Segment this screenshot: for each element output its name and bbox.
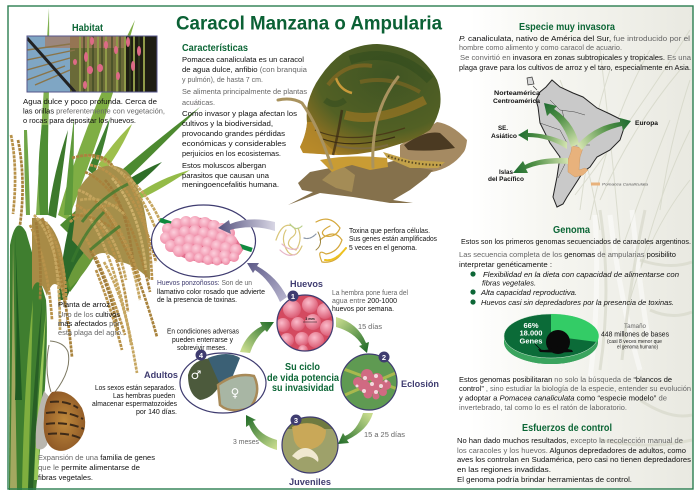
heading: genoma: Genoma <box>553 225 591 236</box>
invasive species text <box>459 34 692 72</box>
adverse conditions text: pueden enterrarse y <box>172 335 233 344</box>
map labels <box>488 90 658 183</box>
genome size note: 448 millones de bases <box>601 330 669 338</box>
snail foot highlights <box>322 164 355 192</box>
gene family text: fibras vegetales. <box>38 473 93 482</box>
control text: No han dado muchos resultados, excepto la recolección manual de <box>457 436 683 445</box>
characteristics text: Como invasor y plaga afectan los <box>182 109 297 118</box>
snail tentacles <box>278 77 398 168</box>
characteristics text: Estos moluscos albergan <box>182 161 266 170</box>
pie chart: genes <box>504 314 599 364</box>
snail foot <box>36 391 52 449</box>
map legend: Pomacea Canaliculata <box>602 182 649 186</box>
title: Caracol Manzana o Ampularia <box>176 14 442 34</box>
genome bullet list: Flexibilidad en la dieta con capacidad de alimentarse con <box>483 270 679 279</box>
rice plant caption: esta plaga del agro. <box>58 328 123 337</box>
characteristics text: acuáticas. <box>182 98 215 107</box>
species range <box>568 146 588 177</box>
toxin text: Toxina que perfora células. <box>349 226 430 235</box>
panel: características <box>182 43 308 189</box>
characteristics text: y pulmón), de hasta 7 cm. <box>182 75 263 84</box>
arrow: eggs stage to callout <box>247 263 287 302</box>
genome bullet list <box>470 270 679 307</box>
toxin text: 5 veces en el genoma. <box>349 243 417 252</box>
right panel background with grass <box>470 6 693 489</box>
stage 1: eggs: Huevos <box>290 279 323 290</box>
genome conclusion text <box>459 375 691 412</box>
illustration: large apple snail <box>278 40 467 205</box>
life cycle <box>92 279 439 488</box>
control text: en las regiones invadidas. <box>457 465 551 474</box>
map labels: Islas <box>499 169 513 176</box>
callout: poisonous eggs <box>152 205 256 277</box>
toxin text: Sus genes están amplificados <box>349 234 437 243</box>
stage 4: adults: 4 <box>199 351 204 360</box>
map labels: SE. <box>498 125 508 132</box>
adults text: Las hembras pueden <box>113 391 175 400</box>
genome text <box>459 237 691 269</box>
poisonous eggs text <box>157 278 265 304</box>
stage 2: hatching: Eclosión <box>401 379 439 390</box>
eggs stage text <box>332 288 408 313</box>
control text: aves los controlan en Sudamérica, pero casi no tienen depredadores <box>457 455 691 464</box>
rice grains <box>11 135 162 373</box>
genome conclusion text: control” , sino estudiar la biología de la especie, entender su evolución <box>459 384 691 393</box>
panicle mass <box>72 166 150 280</box>
adults text: Los sexos están separados. <box>95 383 176 392</box>
gene family text: que le permite alimentarse de <box>38 463 140 472</box>
stage 1: eggs: 3 mm <box>305 317 315 321</box>
cycle arrow 1 to 2 <box>336 317 369 353</box>
map labels: del Pacífico <box>488 176 524 183</box>
habitat text: Agua dulce y poco profunda. Cerca de <box>23 97 157 106</box>
characteristics text: económicas y considerables <box>182 139 286 148</box>
map labels: Norteamérica <box>494 90 540 97</box>
control text <box>457 436 691 484</box>
snail rear body <box>400 122 467 172</box>
invasive species text: P. canaliculata, nativo de América del Sur, fue introducido por el <box>459 34 690 43</box>
genome conclusion text: Estos genomas posibilitaran no solo la búsqueda de “blancos de <box>459 375 672 384</box>
cycle arrow 3 to 4 <box>246 415 277 450</box>
adverse conditions text <box>167 326 239 352</box>
map labels: Asiático <box>491 133 517 140</box>
eggs stage text: agua entre 200-1000 <box>332 296 397 305</box>
rice plant caption: más afectados por <box>58 319 120 328</box>
green stem <box>160 220 252 250</box>
pie label <box>520 321 542 346</box>
left panicle mass <box>32 218 65 296</box>
rice plant caption: Planta de arroz <box>58 300 110 309</box>
map labels: Centroamérica <box>493 98 540 105</box>
control text: El genoma podría brindar herramientas de control. <box>457 475 632 484</box>
gene family text: Expansión de una familia de genes <box>38 453 155 462</box>
heading: esfuerzos de control: Esfuerzos de control <box>522 423 612 434</box>
characteristics text: meningoencefalitis humana. <box>182 180 279 189</box>
genome text: interpretar genéticamente : <box>459 260 552 269</box>
label: 15 a 25 días: 15 a 25 días <box>364 430 405 439</box>
heading: especie muy invasora: Especie muy invasora <box>519 22 616 33</box>
toxin text <box>349 226 437 252</box>
striped shell <box>44 391 85 451</box>
map labels: Europa <box>635 120 658 127</box>
spread arrows <box>513 103 631 173</box>
genome size note: (casi 8 veces menor que <box>607 339 662 345</box>
gene family text <box>38 453 155 482</box>
characteristics text <box>182 55 308 189</box>
snail silhouette <box>535 330 573 354</box>
rice leaves <box>9 8 200 490</box>
cycle centre heading <box>267 362 340 394</box>
characteristics text: Se alimenta principalmente de plantas <box>182 87 307 96</box>
habitat text: o rocas para depositar los huevos. <box>23 116 136 125</box>
cycle centre heading: Su ciclo <box>285 362 320 373</box>
genome text: Estos son los primeros genomas secuenciados de caracoles argentinos. <box>461 237 691 246</box>
rice plant caption: Uno de los cultivos <box>58 310 120 319</box>
stage 1: eggs <box>276 279 336 355</box>
stage 1: eggs: 1 <box>291 292 295 301</box>
cycle arrow 4 to 1 <box>240 322 274 353</box>
cycle arrow 2 to 3 <box>338 413 373 444</box>
characteristics text: Pomacea canaliculata es un caracol <box>182 55 304 64</box>
invasive species text: hombre como alimento y como caracol de acuario. <box>459 43 622 52</box>
egg cluster <box>160 216 243 266</box>
genome text: Las secuencia completa de los genomas de ampularias posibilito <box>459 250 676 259</box>
genome bullet list: fibras vegetales. <box>482 278 536 288</box>
genome size note <box>601 323 669 350</box>
stage 4: adults <box>144 350 266 413</box>
adverse conditions text: sobrevivir meses. <box>177 343 227 352</box>
stage 3: juveniles: Juveniles <box>289 477 331 488</box>
cycle centre heading: de vida potencia <box>267 373 340 384</box>
invasive species text: Se convirtió en invasora en zonas subtropicales y tropicales. Es una <box>460 53 692 62</box>
stage 4: adults: ♂ <box>191 368 201 382</box>
habitat photo <box>27 36 157 92</box>
pie label: 66% <box>523 321 539 330</box>
stage 3: juveniles <box>282 414 338 488</box>
control text: los caracoles y los huevos. Algunos depredadores de adultos, como <box>457 446 686 455</box>
characteristics text: provocando grandes pérdidas <box>182 129 285 138</box>
stage 2: hatching: 2 <box>382 353 386 362</box>
eggs stage text: La hembra pone fuera del <box>332 288 408 297</box>
characteristics text: perjuicios en los ecosistemas. <box>182 149 281 158</box>
snail head <box>320 156 388 172</box>
characteristics text: de agua dulce, anfibio (con branquia <box>182 65 308 74</box>
poisonous eggs text: Huevos ponzoñosos: Son de un <box>157 278 252 287</box>
adverse conditions text: En condiciones adversas <box>167 326 239 336</box>
adults text: almacenar espermatozoides <box>92 399 177 408</box>
characteristics text: cultivos y la biodiversidad, <box>182 119 273 128</box>
stage 4: adults: Adultos <box>144 370 178 381</box>
map legend <box>591 182 649 186</box>
habitat text <box>23 97 165 125</box>
snail shell <box>300 44 441 155</box>
illustration: toxin protein <box>276 219 346 262</box>
arrow: toxin to eggs <box>218 219 275 234</box>
characteristics text: parasitos que causan una <box>182 171 270 180</box>
genome bullet list: Huevos casi sin depredadores por la presencia de toxinas. <box>481 298 674 307</box>
rice plant caption <box>58 300 123 337</box>
pie label: 18.000 <box>520 328 542 338</box>
panel: especie muy invasora <box>459 22 692 207</box>
genome size note: el genoma humano) <box>617 344 658 350</box>
panel: genoma <box>459 225 691 412</box>
rice plant <box>9 8 200 490</box>
pie label: Genes <box>520 336 542 346</box>
panel: habitat <box>23 23 165 125</box>
habitat photo border <box>27 36 157 92</box>
stage 4: adults: ♀ <box>231 386 239 400</box>
cycle centre heading: su invasividad <box>272 383 334 394</box>
genome size note: Tamaño <box>624 323 647 330</box>
panel: esfuerzos de control <box>457 423 691 484</box>
heading: Habitat: Habitat <box>72 23 104 34</box>
invasive species text: plaga grave para los cultivos de arroz y el taro, especialmente en Asia. <box>459 63 691 72</box>
snail on rice stem <box>36 341 85 451</box>
shell markings <box>298 56 430 156</box>
adults text: por 140 días. <box>136 407 177 416</box>
adults text <box>92 383 177 416</box>
poisonous eggs text: de la presencia de toxinas. <box>157 295 237 304</box>
heading: características: Características <box>182 43 249 54</box>
snail siphon <box>383 152 445 168</box>
snail tentacles <box>47 341 69 392</box>
stage 3: juveniles: 3 <box>294 416 298 425</box>
habitat text: las orillas preferentemente con vegetación, <box>23 106 165 116</box>
tentacle shadow <box>333 110 342 155</box>
snail foot <box>288 160 433 205</box>
genome conclusion text: y adoptar a Pomacea canaliculata como “especie modelo” de <box>459 394 667 402</box>
map: South America <box>527 77 626 207</box>
rear shell opening shadow <box>404 132 455 151</box>
genome conclusion text: invertebrado, tal como lo es el ratón de laboratorio. <box>459 403 627 412</box>
eggs stage text: huevos por semana. <box>332 304 394 313</box>
poisonous eggs text: llamativo color rosado que advierte <box>157 287 265 296</box>
leaf streaks through panicle <box>72 184 128 262</box>
genome bullet list: Alta capacidad reproductiva. <box>480 288 577 297</box>
label: 15 días: 15 días <box>358 322 382 331</box>
stage 2: hatching <box>341 352 439 410</box>
label: 3 meses: 3 meses <box>233 437 259 446</box>
